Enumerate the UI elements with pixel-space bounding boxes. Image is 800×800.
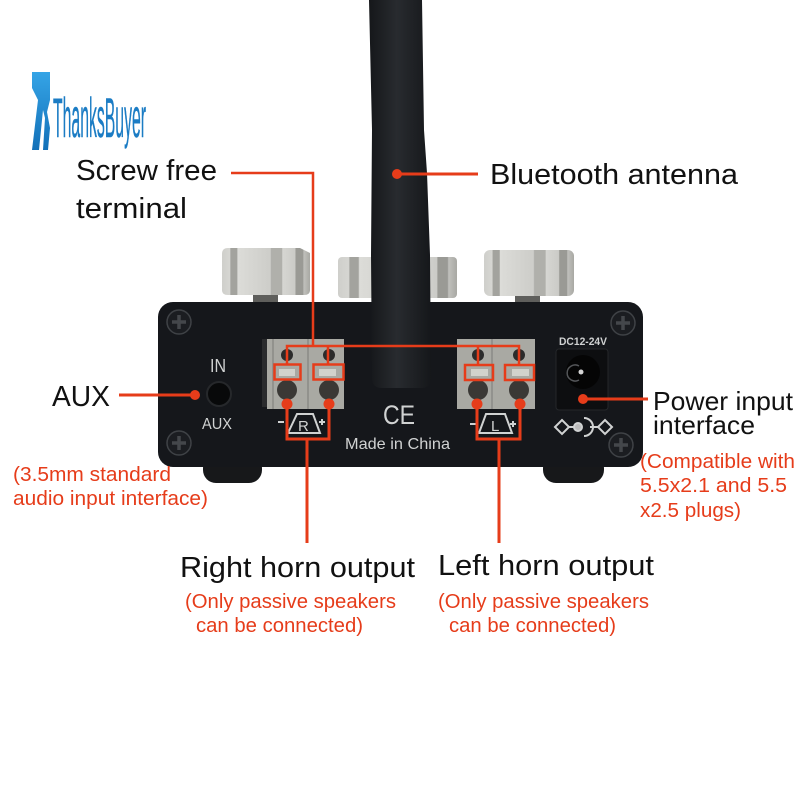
- label: AUX: AUX: [52, 381, 110, 413]
- polarity symbol: [555, 418, 612, 436]
- CE mark and origin text: [345, 400, 450, 453]
- speaker channel letters: R: [298, 418, 309, 435]
- logo: ThanksBuyer: [32, 72, 146, 150]
- speaker channel letters: L: [491, 418, 499, 435]
- label: power input interface: interface: [653, 410, 755, 440]
- leader line: antenna: [392, 169, 478, 179]
- note: left horn: (Only passive speakers: [438, 590, 649, 613]
- knob: right: [484, 250, 574, 302]
- AUX jack and labels: AUX: [202, 416, 232, 433]
- Bluetooth antenna: [369, 0, 431, 388]
- note: power: (Compatible with: [640, 450, 795, 473]
- DC power jack: DC12-24V: [559, 336, 608, 348]
- speaker symbols: [278, 414, 516, 433]
- label: left horn output: Left horn output: [438, 550, 654, 582]
- leader lines: left horn output: [473, 400, 524, 543]
- label: Bluetooth antenna: Bluetooth antenna: [490, 159, 738, 191]
- note: right horn: can be connected): [196, 614, 363, 637]
- screws: [167, 310, 635, 457]
- label: power input interface: Power input: [653, 386, 794, 416]
- AUX jack and labels: [202, 356, 232, 433]
- leader lines: right horn output: [283, 400, 333, 543]
- CE mark and origin text: CE: [383, 400, 415, 430]
- DC power jack: [556, 336, 608, 410]
- terminal: left channel: [457, 339, 535, 409]
- note: left horn: can be connected): [449, 614, 616, 637]
- label: screw free terminal: Screw free: [76, 155, 217, 187]
- knob: left: [222, 248, 310, 302]
- note: right horn: (Only passive speakers: [185, 590, 396, 613]
- leader lines: screw free terminal: [231, 173, 534, 380]
- note: AUX: [13, 463, 208, 510]
- leader line: AUX: [119, 390, 200, 400]
- label: screw free terminal: terminal: [76, 193, 187, 225]
- note: power: x2.5 plugs): [640, 499, 741, 522]
- note: AUX: audio input interface): [13, 487, 208, 510]
- amplifier body: [158, 302, 643, 467]
- note: left horn: [438, 590, 649, 637]
- label: right horn output: Right horn output: [180, 552, 415, 584]
- speaker channel letters: [298, 418, 499, 435]
- feet: [203, 455, 604, 483]
- note: power: 5.5x2.1 and 5.5: [640, 474, 787, 497]
- terminal: right channel: [262, 339, 344, 409]
- leader line: power: [578, 394, 648, 404]
- note: AUX: (3.5mm standard: [13, 463, 171, 486]
- label: screw free terminal: [76, 155, 217, 225]
- AUX jack and labels: IN: [210, 356, 226, 376]
- knob: middle: [338, 257, 457, 298]
- text: ThanksBuyer: [53, 86, 146, 149]
- CE mark and origin text: Made in China: [345, 436, 450, 453]
- note: right horn: [185, 590, 396, 637]
- label: power input interface: [653, 386, 794, 440]
- note: power: [640, 450, 795, 522]
